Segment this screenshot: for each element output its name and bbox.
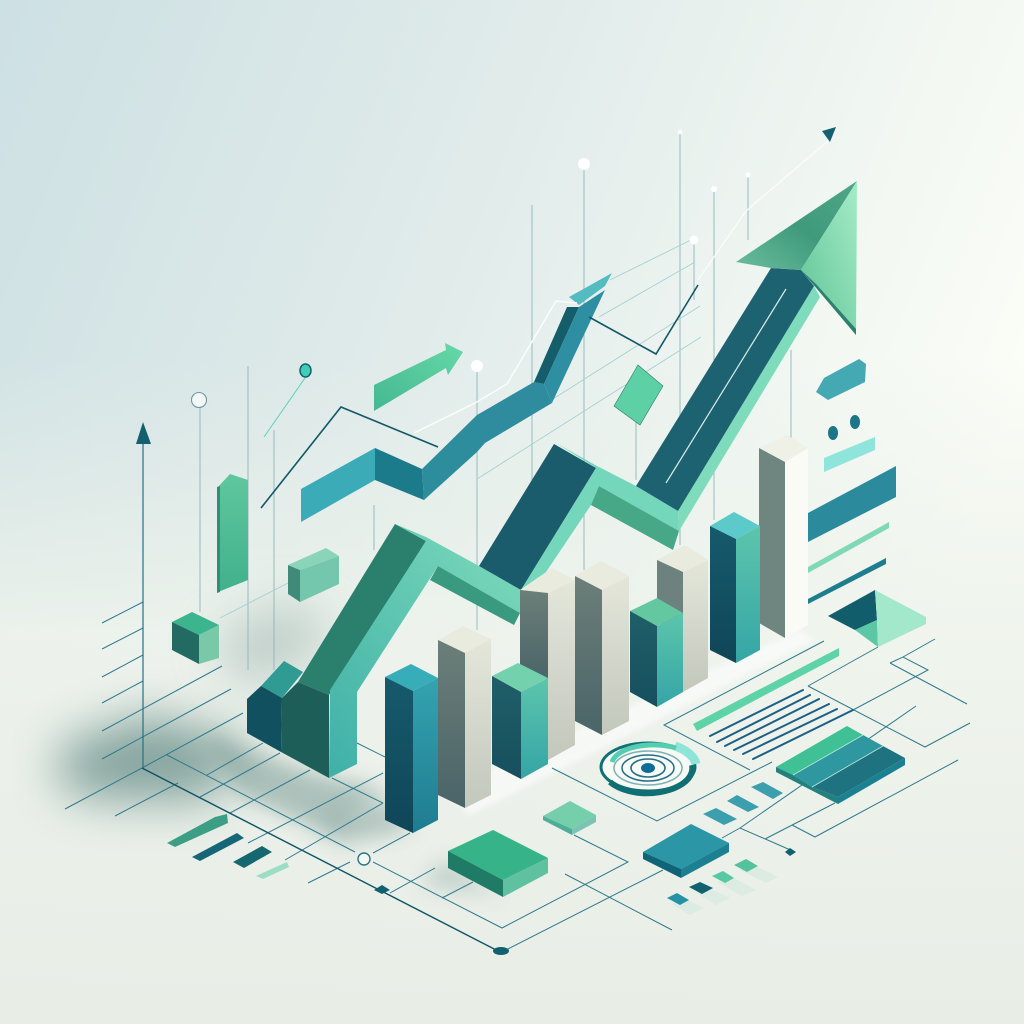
underside one (430, 566, 520, 625)
main zigzag ribbon (247, 181, 857, 778)
target ring chart (601, 743, 696, 793)
right dots (828, 415, 860, 440)
bar: teal left (385, 664, 438, 833)
marker dots (192, 130, 750, 408)
base block (247, 661, 303, 752)
floor grid (65, 602, 970, 953)
bar: grey mid right (657, 545, 708, 692)
white trend line (414, 301, 577, 433)
small floating box (288, 548, 339, 602)
green strip along shaft (678, 286, 820, 531)
faceted pyramid icon (828, 590, 926, 647)
bar: grey centre (575, 561, 629, 735)
axis line (142, 768, 500, 952)
floor shadows (60, 600, 815, 895)
small teal tiles (703, 782, 783, 825)
light side (329, 524, 534, 778)
large green block (448, 830, 548, 897)
shaft highlight (666, 289, 786, 483)
right hexagon icon (816, 359, 866, 400)
floating green arrow (374, 343, 463, 411)
bar: green mid right (630, 598, 683, 707)
bar: green centre (492, 663, 548, 779)
floating cube (172, 612, 219, 664)
front dark green face (281, 682, 329, 778)
upper white line with arrowhead (698, 127, 836, 280)
background guide lines (200, 132, 791, 670)
teal block (643, 824, 729, 878)
rising dark green segment (298, 524, 426, 695)
left floor stripes (167, 814, 289, 879)
right legend stripes (808, 437, 896, 604)
bar: tall grey right (759, 435, 808, 638)
document panel (693, 648, 853, 759)
bar: grey centre left (520, 568, 575, 760)
second dark segment (479, 444, 596, 590)
vertical axis with arrow (136, 422, 151, 768)
thin trend line: dark right (589, 285, 698, 354)
underside two (591, 486, 679, 550)
upper floating zigzag ribbon (301, 273, 612, 522)
floating green diamond (614, 365, 663, 425)
thin trend line: dark left (261, 407, 438, 508)
green pin marker (264, 364, 311, 437)
bar: teal right (710, 512, 760, 663)
vertical green block (217, 474, 248, 593)
arrowhead (736, 181, 857, 335)
bar: grey left (438, 626, 491, 808)
second light band (521, 443, 679, 590)
axis markers (358, 848, 796, 955)
small green block (543, 801, 596, 835)
arrow shaft (636, 268, 814, 511)
tiny tiles row (667, 859, 778, 915)
tri-colour slab (776, 726, 905, 804)
